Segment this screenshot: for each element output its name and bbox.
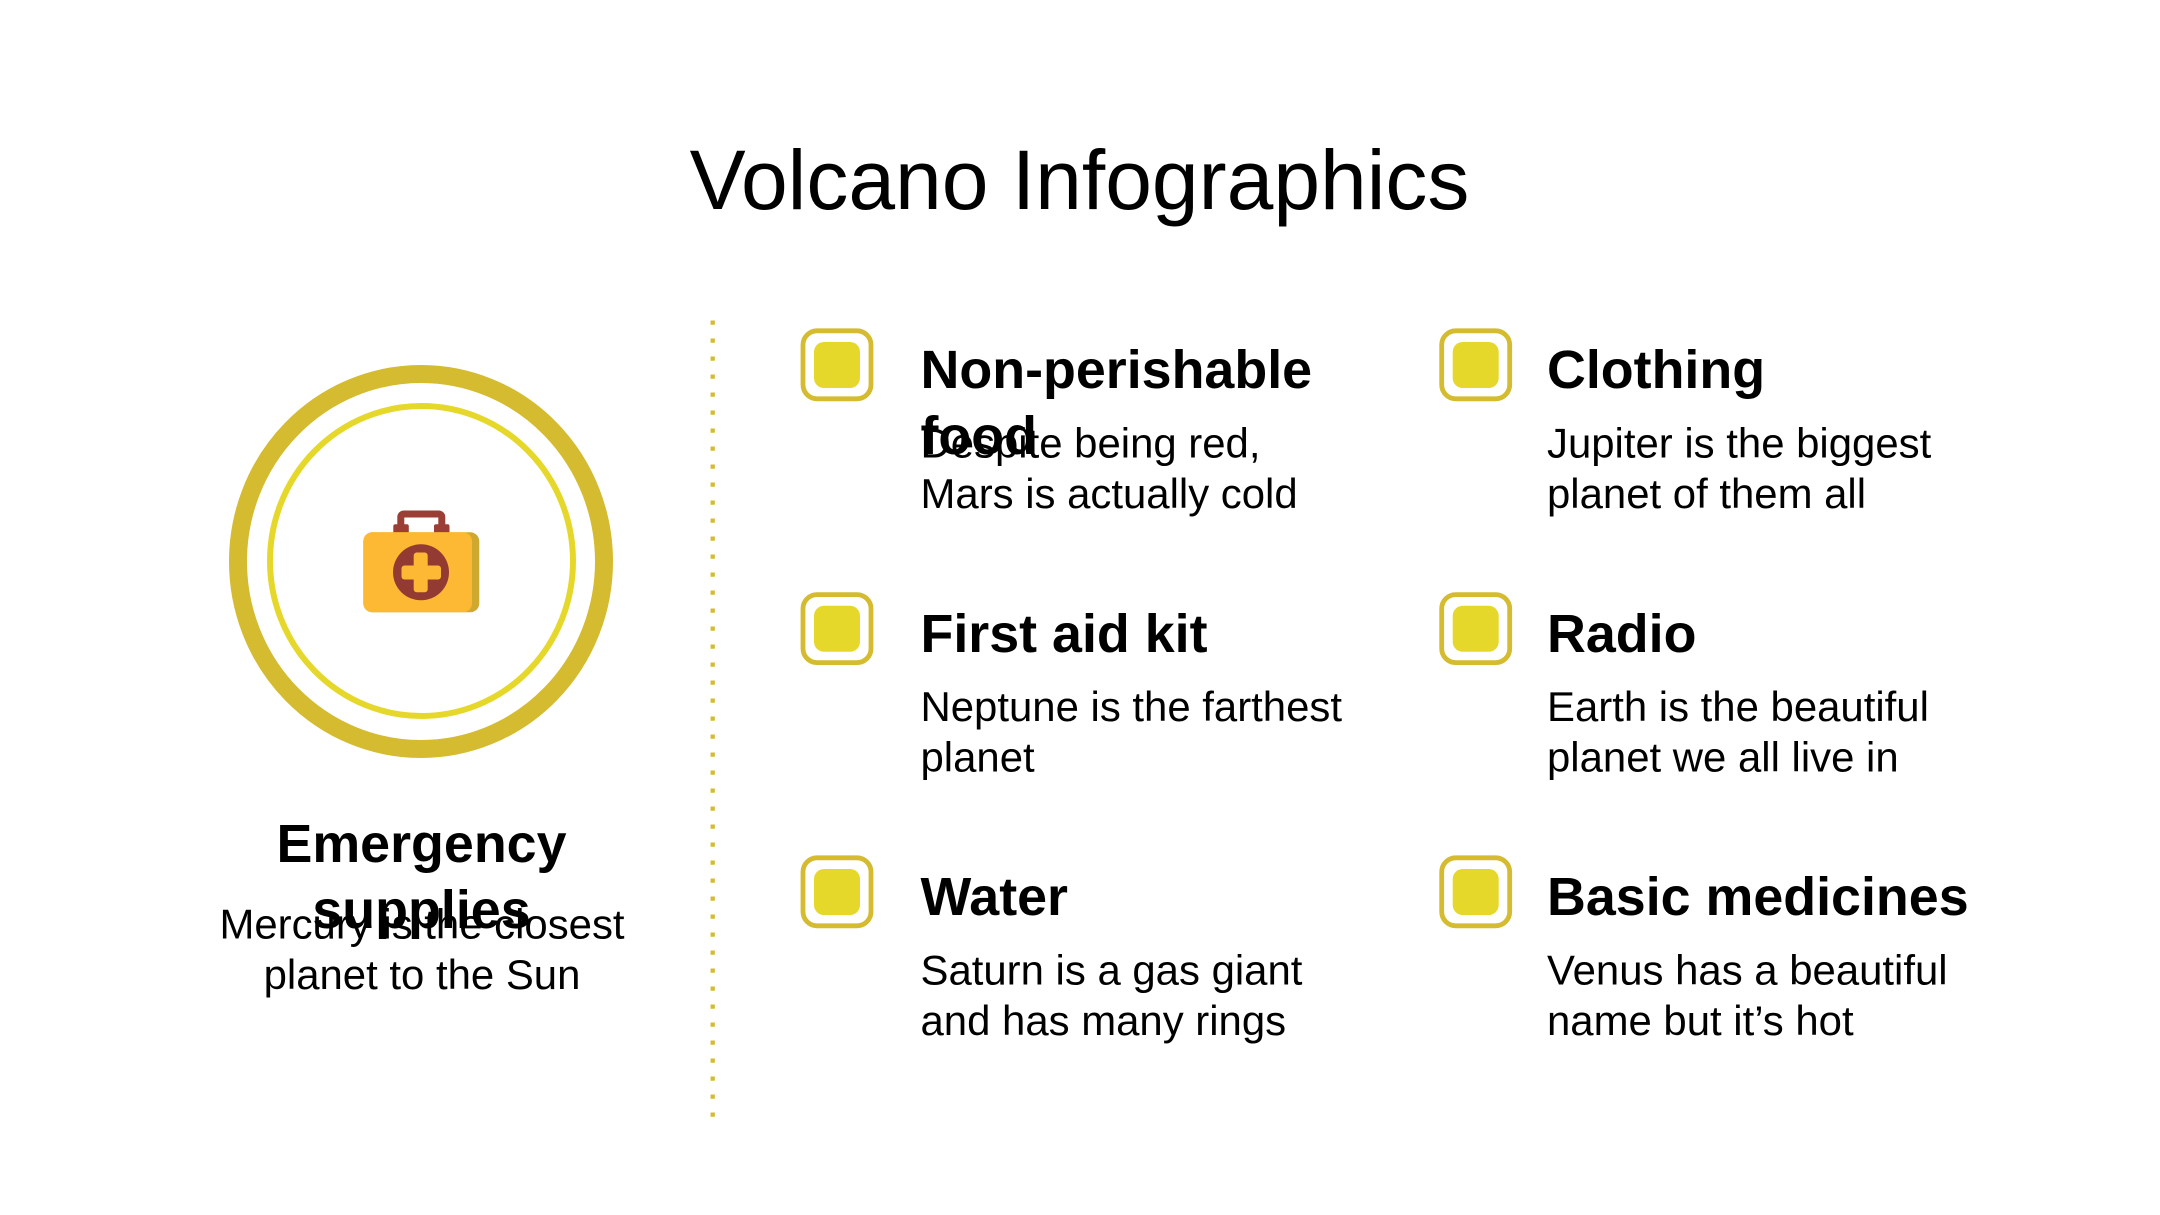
item: radio [1442,595,1929,780]
text: water description: and has many rings [920,997,1286,1044]
text: non-perishable description: Mars is actually cold [920,470,1298,517]
text: emergency supplies description [219,900,625,998]
text: water description: Saturn is a gas giant [920,946,1303,994]
icon: checkbox [1442,595,1510,663]
item: basic medicines [1442,858,1969,1044]
item: clothing [1442,331,1932,517]
text: first aid kit description [920,683,1342,780]
outer ring [238,374,604,749]
text: basic medicines description: name but it’s hot [1547,997,1854,1044]
icon: checkbox [803,595,871,663]
item: non-perishable food [803,331,1312,517]
text: first aid kit description: planet [920,733,1035,780]
panel: emergency supplies [219,374,625,998]
text: radio description: planet we all live in [1547,733,1899,780]
heading: emergency supplies: supplies [312,880,531,940]
text: non-perishable description: Despite being red, [920,419,1260,466]
heading: basic medicines: Basic medicines [1547,867,1969,927]
text: first aid kit description: Neptune is the farthest [920,683,1342,730]
heading: non-perishable food: food [920,406,1037,466]
inner ring [270,406,573,716]
heading: first aid kit: First aid kit [920,604,1208,664]
icon: checkbox [803,331,871,399]
heading: radio: Radio [1547,604,1696,664]
text: non-perishable description [920,419,1298,517]
text: basic medicines description [1547,946,1948,1044]
text: emergency supplies description: planet to the Sun [264,951,580,998]
text: radio description: Earth is the beautiful [1547,683,1929,730]
heading: clothing: Clothing [1547,340,1765,400]
text: radio description [1547,683,1929,780]
item: water [803,858,1303,1044]
title: Volcano Infographics [690,133,1469,227]
text: clothing description: planet of them all [1547,470,1866,517]
text: emergency supplies description: Mercury is the closest [219,900,625,948]
text: basic medicines description: Venus has a beautiful [1547,946,1948,994]
icon: checkbox [1442,858,1510,926]
heading: non-perishable food: Non-perishable [920,340,1312,400]
icon: checkbox [1442,331,1510,399]
text: water description [920,946,1303,1044]
heading: emergency supplies [276,814,567,940]
text: clothing description [1547,419,1932,517]
text: clothing description: Jupiter is the biggest [1547,419,1932,466]
icon: checkbox [803,858,871,926]
heading: non-perishable food [920,340,1312,466]
icon: first aid kit [363,514,479,612]
item: first aid kit [803,595,1342,780]
heading: water: Water [920,867,1068,927]
heading: emergency supplies: Emergency [276,814,567,874]
